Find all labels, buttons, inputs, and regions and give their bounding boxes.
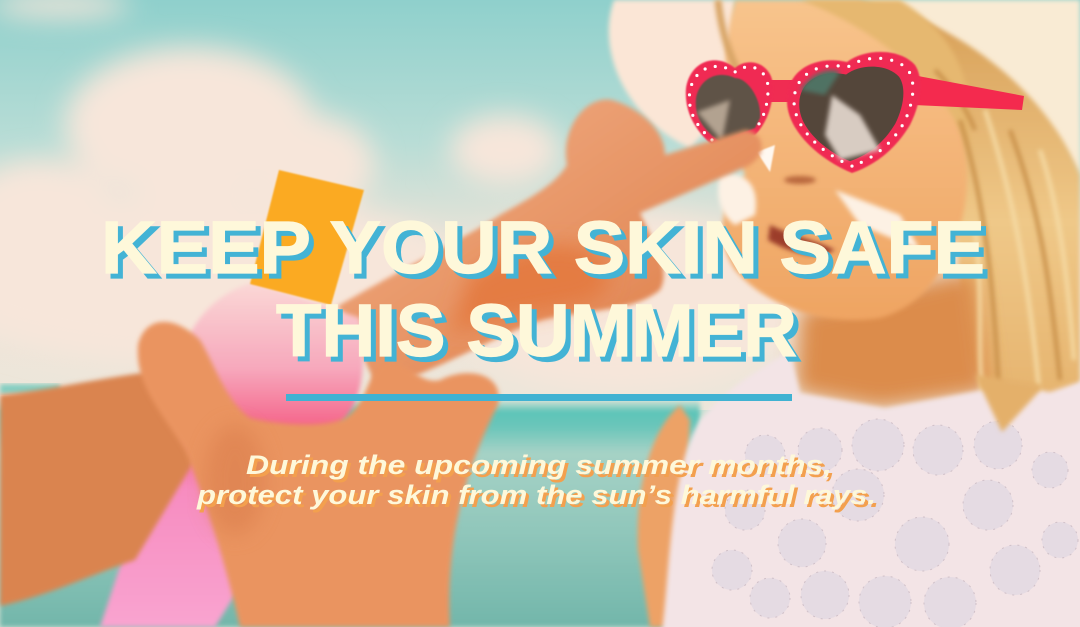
subtitle text	[196, 450, 876, 510]
subtitle text: During the upcoming summer months,	[246, 450, 832, 480]
palm shading	[205, 425, 265, 535]
right lens frame	[787, 52, 920, 173]
parent's arm and finger on nose	[338, 100, 762, 388]
parent's left arm and hand with bottle	[0, 322, 499, 627]
subtitle shadow: protect your skin from the sun’s harmful rays.	[199, 483, 879, 513]
palm and thumb	[138, 322, 499, 627]
title shadow	[106, 211, 990, 377]
background: sky and clouds	[0, 0, 1080, 410]
title	[101, 206, 990, 377]
face	[723, 0, 967, 320]
loose hair strands	[718, 0, 1074, 420]
hair tips over dress	[975, 375, 1045, 432]
bottle body	[100, 282, 363, 627]
sunscreen bottle	[100, 170, 364, 627]
girl with sun hat, hair and sunglasses	[609, 0, 1080, 432]
subtitle text: protect your skin from the sun’s harmful rays.	[196, 480, 876, 510]
nose and mouth	[768, 176, 835, 255]
subtitle	[196, 450, 879, 513]
divider rule	[286, 394, 792, 401]
glasses strap	[914, 76, 1024, 110]
hair over forehead	[800, 0, 970, 150]
title text: KEEP YOUR SKIN SAFE	[101, 206, 985, 289]
glasses bridge	[762, 80, 794, 102]
forearm	[0, 372, 195, 606]
dress eyelet pattern	[712, 419, 1078, 627]
background: sea	[0, 398, 700, 627]
title shadow: THIS SUMMER	[281, 294, 802, 377]
hair	[900, 10, 1080, 432]
title shadow: KEEP YOUR SKIN SAFE	[106, 211, 990, 294]
title text: THIS SUMMER	[276, 289, 797, 372]
sunscreen on cheek	[718, 174, 920, 250]
arm of girl	[638, 405, 690, 627]
subtitle shadow: During the upcoming summer months,	[249, 453, 835, 483]
orange cap	[250, 170, 364, 305]
title text	[101, 206, 985, 372]
sun hat	[609, 0, 1080, 175]
subtitle shadow	[199, 453, 879, 513]
white eyelet dress	[638, 350, 1080, 627]
left lens frame	[686, 60, 773, 145]
heart sunglasses	[686, 52, 1024, 173]
neck	[795, 270, 990, 408]
